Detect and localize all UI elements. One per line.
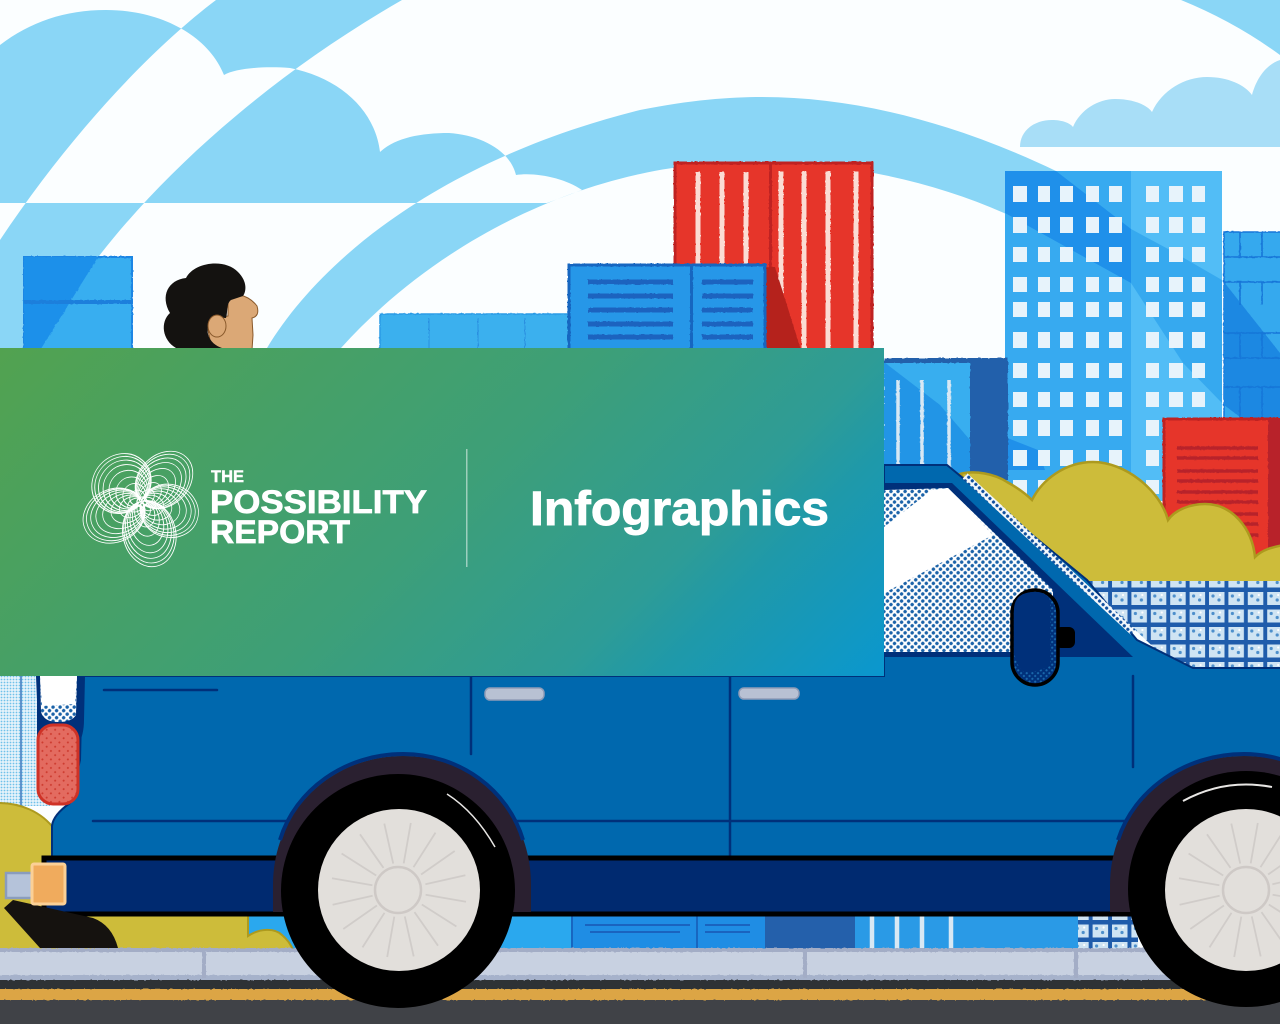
tail light xyxy=(38,725,78,804)
bush: behind the van, right side xyxy=(960,462,1280,590)
tow hitch xyxy=(4,900,118,948)
windshield highlight xyxy=(884,488,993,593)
banner background xyxy=(0,348,884,676)
report name xyxy=(210,468,427,550)
report name: POSSIBILITY xyxy=(210,484,427,520)
building: red block lower right xyxy=(1164,419,1280,569)
heading: Infographics xyxy=(530,483,829,536)
person: head with black curly hair xyxy=(164,263,258,350)
rear window xyxy=(36,676,85,745)
hub center xyxy=(375,867,421,913)
window frame and quarter glass xyxy=(884,483,1133,657)
building: tall blue tower with windows xyxy=(1005,171,1222,501)
spokes xyxy=(332,823,466,957)
hub center xyxy=(1223,867,1269,913)
cloud: upper right xyxy=(1020,60,1280,147)
tire highlight xyxy=(1183,784,1272,801)
report name: REPORT xyxy=(210,514,350,550)
tire xyxy=(1128,771,1280,1007)
door handle: front xyxy=(739,688,799,699)
building: left blue block xyxy=(24,257,132,352)
tire highlight xyxy=(447,794,495,847)
building: blue grid seen through rear window xyxy=(1083,581,1280,672)
sidewalk xyxy=(0,948,1280,981)
building: striped block behind banner xyxy=(884,358,1008,480)
arch trim xyxy=(280,754,523,840)
wheel arch xyxy=(1110,756,1280,912)
building: blue with horizontal lines xyxy=(569,265,765,352)
tire xyxy=(281,774,515,1008)
door seams and body lines xyxy=(93,676,1133,856)
orange side marker xyxy=(32,864,65,904)
side mirror xyxy=(1012,590,1075,685)
building: noisy light block at left edge xyxy=(0,676,50,806)
door handle: rear xyxy=(485,688,544,700)
lower skyline strip under the van xyxy=(246,910,1138,950)
van xyxy=(36,465,1280,914)
road with yellow line xyxy=(0,980,1280,1024)
logo mark xyxy=(74,440,205,572)
banner xyxy=(0,348,884,676)
bush: left side under the van xyxy=(0,803,293,950)
arch trim xyxy=(1118,754,1280,840)
windshield glass halftone xyxy=(884,488,1053,652)
wheel arch xyxy=(273,756,531,912)
building: right brick block xyxy=(1224,232,1280,450)
ear xyxy=(208,315,226,337)
spokes xyxy=(1179,823,1280,957)
report name: THE xyxy=(211,468,244,486)
building: low light blue block xyxy=(380,314,570,352)
hub xyxy=(318,809,480,971)
sky arcs and large cloud xyxy=(0,0,1280,348)
face xyxy=(208,295,258,350)
windshield edge strip xyxy=(965,476,1133,632)
wheel: rear xyxy=(273,754,531,1008)
rocker panel xyxy=(44,858,1280,914)
van body xyxy=(52,465,1280,862)
divider xyxy=(466,449,468,567)
building: red tower xyxy=(675,163,872,352)
hair xyxy=(164,263,245,348)
buildings: skyline xyxy=(24,163,1280,569)
wheel: front xyxy=(1110,754,1280,1007)
rear bumper plate xyxy=(6,873,32,898)
hub xyxy=(1165,809,1280,971)
